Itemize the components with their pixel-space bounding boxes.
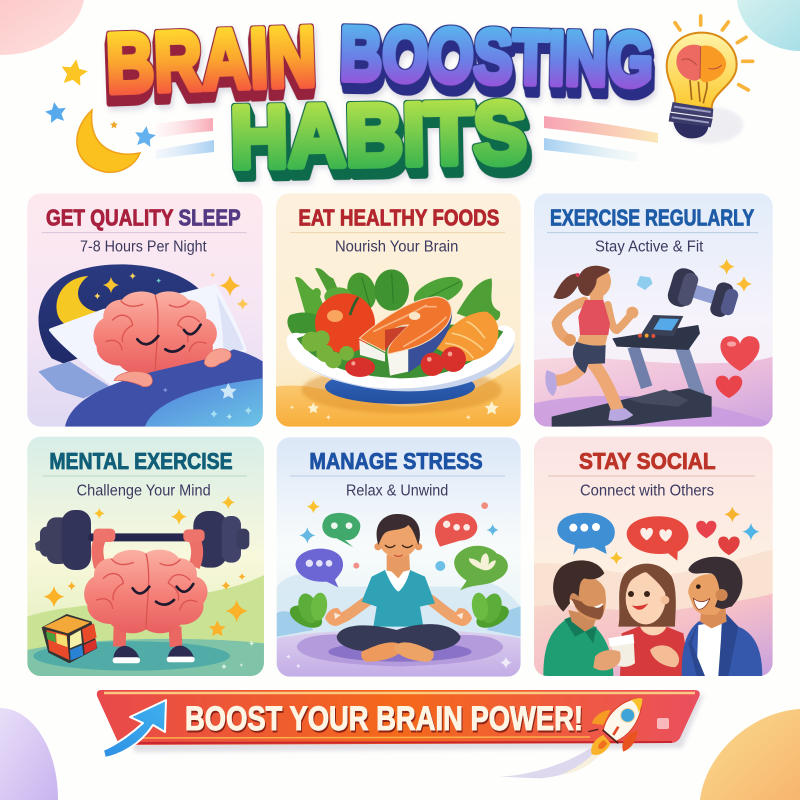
speed streaks right (544, 116, 658, 162)
panel: stay social (534, 437, 773, 676)
heading: Manage Stress: MANAGE STRESS (309, 448, 483, 474)
panel: sleep (27, 193, 263, 427)
subtitle: 7-8 Hours Per Night (80, 238, 207, 255)
icon: blue star (44, 100, 68, 124)
icon: yellow star (59, 57, 90, 87)
illustration: salmon plate (276, 268, 521, 427)
subtitle: Stay Active & Fit (595, 238, 704, 255)
icon: rocket (500, 698, 642, 778)
heading: Mental Exercise: MENTAL EXERCISE (49, 448, 233, 474)
corner blob: yellow (700, 709, 800, 800)
speed streaks left (156, 118, 214, 159)
subtitle: Connect with Others (580, 483, 714, 500)
banner: boost your brain power (97, 690, 704, 778)
panel: healthy foods (276, 193, 521, 427)
title decorations: stars and moon (44, 57, 157, 172)
icon: small star (110, 121, 118, 128)
icon: crescent moon (77, 110, 140, 172)
icon: light bulb with brain (667, 16, 753, 143)
heading: Stay Social: STAY SOCIAL (579, 448, 716, 474)
heading: Get Quality Sleep: GET QUALITY SLEEP (46, 205, 241, 231)
title word: BRAIN: BRAIN (104, 9, 318, 111)
title (104, 9, 654, 187)
banner text: BOOST YOUR BRAIN POWER! (185, 700, 583, 738)
icon: blue arrow (103, 700, 166, 758)
heading: Eat Healthy Foods: EAT HEALTHY FOODS (298, 204, 499, 230)
subtitle: Relax & Unwind (346, 483, 448, 500)
illustration: meditation (277, 500, 521, 677)
subtitle: Nourish Your Brain (335, 238, 458, 255)
corner blob: purple (0, 708, 58, 800)
subtitle: Challenge Your Mind (77, 483, 211, 500)
panel: manage stress (277, 437, 521, 677)
illustration: sleeping brain (38, 264, 263, 427)
illustration: brain lifting barbell (27, 496, 264, 676)
panel: exercise (534, 193, 773, 427)
icon: pink square (657, 718, 669, 729)
icon: blue star right (133, 125, 157, 147)
illustration: runner on treadmill (534, 259, 773, 427)
corner blob: blue (737, 0, 800, 51)
title word: HABITS: HABITS (230, 84, 527, 187)
panel: mental exercise (27, 437, 264, 676)
corner blob: pink (0, 0, 84, 55)
illustration: friends talking (534, 506, 773, 676)
title word: BOOSTING: BOOSTING (339, 12, 654, 103)
